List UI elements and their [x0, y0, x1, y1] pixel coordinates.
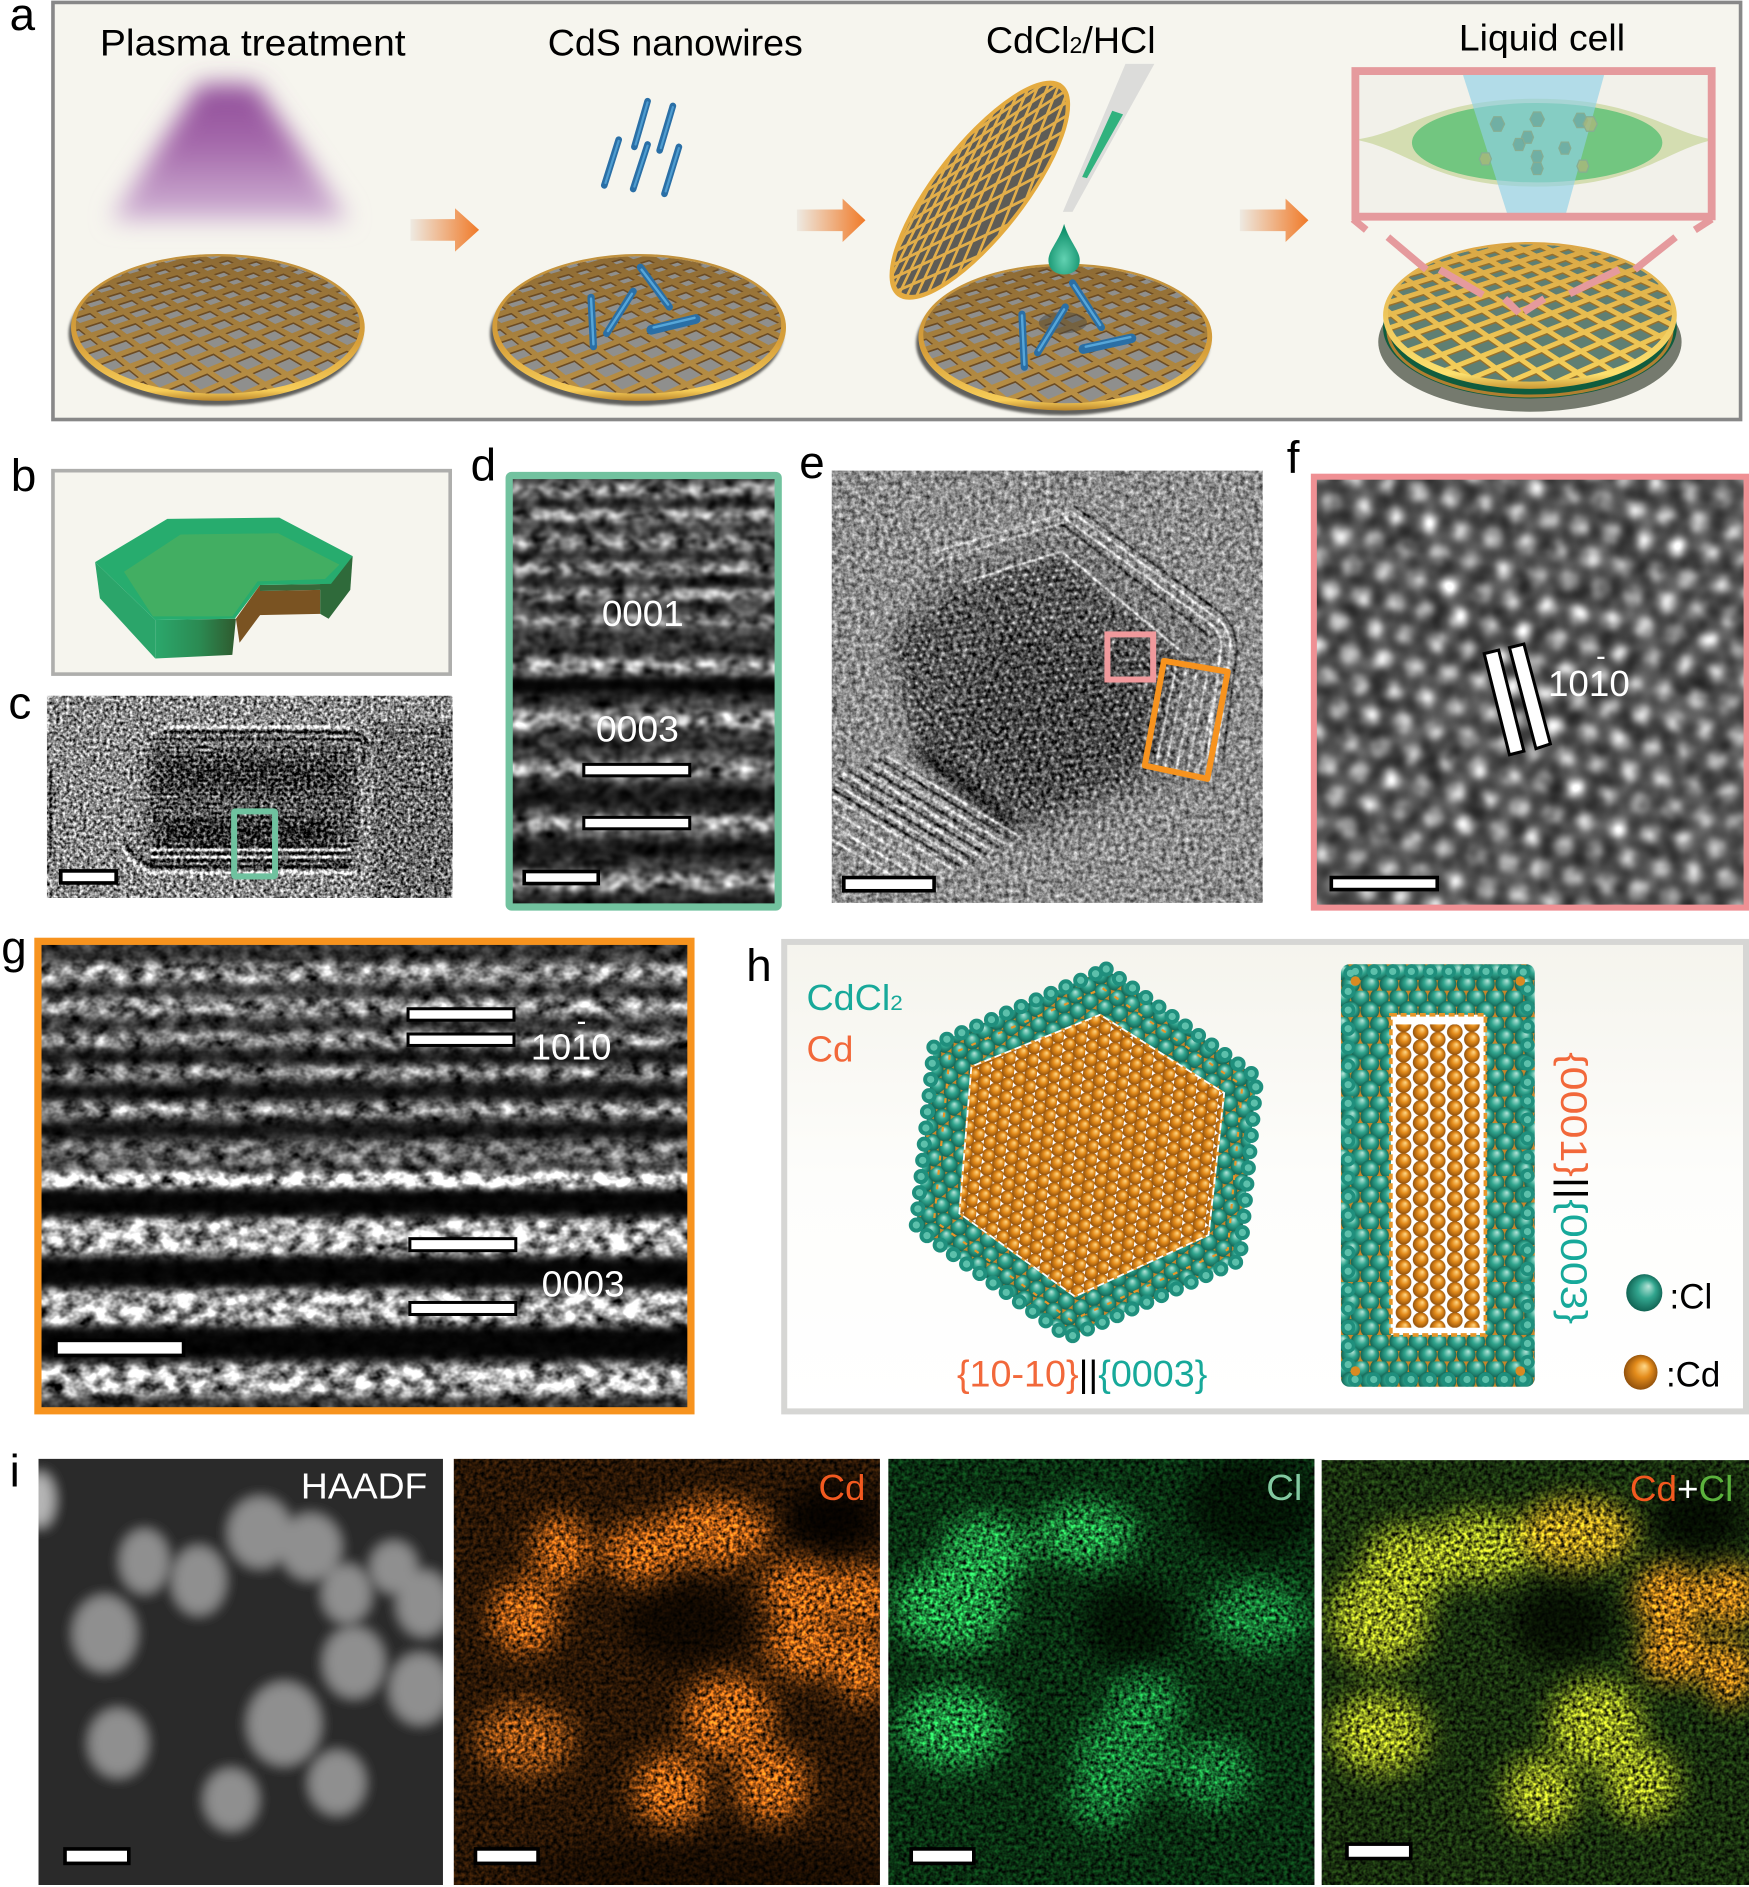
panel b: nanosheet model	[11, 450, 450, 674]
orange selection box	[1145, 661, 1228, 779]
panel label c: c	[8, 678, 31, 729]
label Cd+Cl: Cd+Cl	[1630, 1468, 1733, 1509]
green liquid	[1412, 103, 1662, 182]
Cd map	[454, 1458, 880, 1885]
caption {10-10}||{0003}: {10-10}||{0003}	[957, 1353, 1207, 1395]
panel f: atomic lattice image	[1287, 432, 1749, 917]
label 1010: -	[577, 1005, 586, 1037]
green selection box	[234, 811, 275, 876]
heading: CdCl2/HCl: CdCl2/HCl	[986, 19, 1156, 61]
icon: pipette	[1063, 64, 1154, 212]
scale bar	[911, 1849, 974, 1863]
atomic model: rectangular side view	[1341, 964, 1535, 1387]
liquid lens	[1355, 99, 1714, 187]
legend: Cd sphere	[1624, 1355, 1658, 1390]
caption {0001}||{0003} rotated: {0001} || {0003}	[1553, 1052, 1595, 1324]
panel h: atomic models	[746, 940, 1746, 1411]
TEM micrograph f	[1302, 466, 1749, 917]
nanoparticles	[1479, 112, 1597, 175]
icon: TEM grid 2 with nanowires	[61, 249, 1051, 407]
pink selection box	[1107, 634, 1153, 680]
panel d: high-resolution lattice image	[471, 439, 794, 927]
label 0003: 0003	[596, 709, 679, 750]
panel label h: h	[746, 940, 772, 991]
label 1010: 1010	[1548, 663, 1630, 704]
HAADF image	[38, 1458, 443, 1885]
panel label e: e	[799, 437, 825, 488]
scale bar	[475, 1849, 538, 1863]
TEM micrograph d	[512, 479, 775, 904]
legend text Cd: Cd	[806, 1029, 853, 1070]
plasma cloud	[111, 84, 349, 220]
panel a: preparation workflow	[0, 0, 1749, 634]
d-spacing markers top	[408, 1009, 514, 1045]
scale bar	[844, 878, 934, 891]
icon: droplet	[1048, 224, 1080, 274]
arrow 1	[410, 208, 479, 252]
legend text CdCl2: CdCl2	[806, 977, 903, 1018]
panel label f: f	[1287, 432, 1300, 483]
heading: CdS nanowires: CdS nanowires	[548, 21, 803, 63]
label 1010	[1548, 641, 1630, 704]
scale bar	[1347, 1844, 1411, 1859]
panel g: lattice fringe image	[3, 938, 695, 1414]
legend: Cl sphere	[1626, 1274, 1662, 1311]
arrow 3	[1240, 199, 1308, 242]
label 0001: 0001	[602, 593, 684, 634]
panel label g: g	[1, 922, 27, 973]
TEM micrograph c	[46, 696, 453, 898]
icon: assembled liquid cell grid	[952, 237, 1749, 412]
atomic model: hexagon top view	[916, 969, 1257, 1337]
core-shell hexagon	[95, 518, 353, 658]
d-spacing markers bottom	[410, 1239, 516, 1314]
panel label b: b	[11, 450, 36, 501]
lattice markers	[1484, 644, 1550, 755]
panel e: TEM top view of hexagon	[799, 437, 1275, 915]
scale bar	[61, 871, 116, 883]
scale bar	[56, 1340, 184, 1355]
icon: TEM grid 3 with nanowires	[488, 259, 1477, 417]
green frame	[509, 475, 778, 907]
icon: floating nanowires	[604, 101, 679, 194]
pink frame	[1314, 477, 1747, 908]
label Cl: Cl	[1266, 1467, 1302, 1508]
label 1010: 1010	[531, 1026, 611, 1067]
scale bar	[65, 1849, 129, 1863]
orange frame	[38, 941, 691, 1411]
heading: Plasma treatment: Plasma treatment	[100, 21, 406, 63]
scale bar	[1331, 878, 1437, 890]
icon: TEM grid 1	[0, 249, 630, 407]
label 0003: 0003	[542, 1263, 625, 1304]
electron beam	[1463, 73, 1605, 213]
inset: liquid cell cross-section	[1355, 71, 1714, 220]
Cl map	[888, 1458, 1314, 1885]
TEM micrograph e	[832, 470, 1263, 903]
label Cd: Cd	[819, 1467, 865, 1508]
scale bar	[524, 872, 598, 884]
label 1010	[531, 1005, 611, 1067]
legend text Cl: :Cl	[1670, 1277, 1712, 1316]
Cd+Cl overlay map	[1322, 1460, 1749, 1885]
panel label i: i	[10, 1446, 20, 1497]
icon: tilted gold grid	[618, 0, 1249, 634]
panel i: elemental maps	[10, 1435, 1749, 1887]
label HAADF: HAADF	[301, 1466, 427, 1507]
arrow 2	[797, 199, 865, 242]
inset connector lines	[1353, 219, 1712, 313]
d-spacing markers	[584, 764, 690, 829]
legend text Cd: :Cd	[1666, 1356, 1720, 1395]
panel c: TEM image of nanosheet side view	[10, 694, 453, 898]
panel label d: d	[471, 439, 496, 490]
label 1010: -	[1596, 641, 1606, 673]
TEM micrograph g	[42, 944, 688, 1408]
heading: Liquid cell: Liquid cell	[1459, 17, 1625, 59]
